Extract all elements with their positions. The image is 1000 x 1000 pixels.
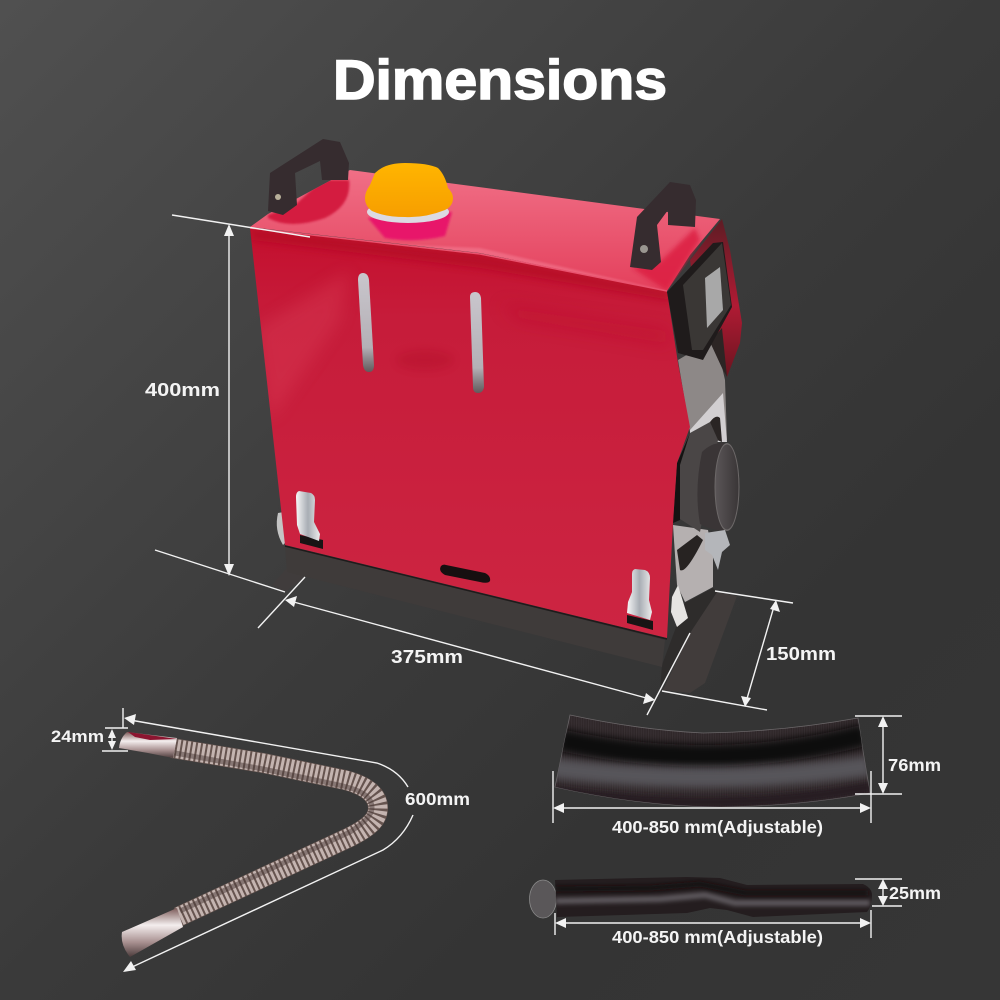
duct ribs xyxy=(557,716,862,794)
top reflections xyxy=(268,180,700,291)
left latch xyxy=(296,491,323,549)
wide air duct xyxy=(554,714,870,808)
lower slot xyxy=(440,565,490,583)
dimension: 400mm height xyxy=(145,215,310,592)
front panel xyxy=(250,228,690,638)
narrow air duct xyxy=(530,877,872,918)
left handle screw xyxy=(275,194,281,200)
air outlet tube xyxy=(697,443,740,531)
duct bottom band xyxy=(555,787,870,802)
outlet back plate xyxy=(675,422,718,532)
dimension: 150mm depth: 150mm xyxy=(766,643,836,664)
display screen xyxy=(705,267,723,328)
dimension: 25mm and narrow duct length: 400-850 mm(Adjustable) xyxy=(612,927,823,947)
outlet plate dark edge xyxy=(673,433,690,523)
right mounting foot xyxy=(663,592,737,693)
slot left xyxy=(358,273,374,372)
side opening xyxy=(710,417,722,442)
white side band xyxy=(690,393,727,442)
dimension: 400mm height: 400mm xyxy=(145,379,220,400)
right handle screw xyxy=(640,245,648,253)
slot right xyxy=(470,292,484,393)
top metal end xyxy=(119,732,177,758)
rear dark red panel xyxy=(690,219,742,377)
top panel xyxy=(250,170,720,291)
heater unit xyxy=(250,139,742,693)
light duct stripe xyxy=(555,895,870,903)
left side bracket xyxy=(277,512,288,545)
spring ribs xyxy=(172,748,378,917)
base bar edge xyxy=(285,546,667,639)
top metal end reflection xyxy=(128,732,177,740)
duct end ball xyxy=(530,880,556,918)
filler cap xyxy=(365,163,453,240)
dimension: 375mm width xyxy=(258,577,690,715)
exhaust tube xyxy=(119,732,378,957)
left handle xyxy=(268,139,349,215)
dimension: 76mm and wide duct length xyxy=(553,716,941,837)
lower side opening xyxy=(677,535,703,570)
light lower band xyxy=(552,766,870,778)
spring body xyxy=(172,748,378,917)
dimension: 24mm tube diameter: 24mm xyxy=(51,728,104,746)
dimension: 76mm and wide duct length: 76mm xyxy=(888,755,941,775)
white side clamp xyxy=(671,585,688,627)
gray side plate xyxy=(678,340,727,440)
front shading xyxy=(254,230,667,398)
spring shade xyxy=(175,753,372,911)
left mounting foot xyxy=(272,568,305,592)
base bar xyxy=(285,546,665,667)
right foot shadow xyxy=(660,588,717,692)
cap pink reflection xyxy=(368,212,452,240)
bottom metal end xyxy=(122,908,183,957)
dimension: 600mm tube length xyxy=(123,714,470,972)
title: Dimensions xyxy=(333,48,667,111)
dimension: 600mm tube length: 600mm xyxy=(405,789,470,809)
dimension: 375mm width: 375mm xyxy=(391,646,463,667)
side clamp xyxy=(705,530,730,570)
dark duct stripe xyxy=(555,884,868,893)
cap body xyxy=(365,163,453,217)
dimension: 150mm depth xyxy=(662,591,836,710)
dark upper band xyxy=(560,735,865,756)
dimension: 25mm and narrow duct length: 25mm xyxy=(889,883,941,903)
dimension: 24mm tube diameter xyxy=(51,708,128,751)
right handle xyxy=(630,182,696,270)
right latch xyxy=(627,569,653,630)
dark section below panel xyxy=(710,328,727,377)
dimension: 25mm and narrow duct length xyxy=(555,879,941,947)
lower silver panel xyxy=(673,525,713,602)
dimension: 76mm and wide duct length: 400-850 mm(Adjustable) xyxy=(612,817,823,837)
control panel xyxy=(667,242,732,360)
cap white ring xyxy=(367,201,449,223)
top front edge highlight xyxy=(250,228,667,291)
